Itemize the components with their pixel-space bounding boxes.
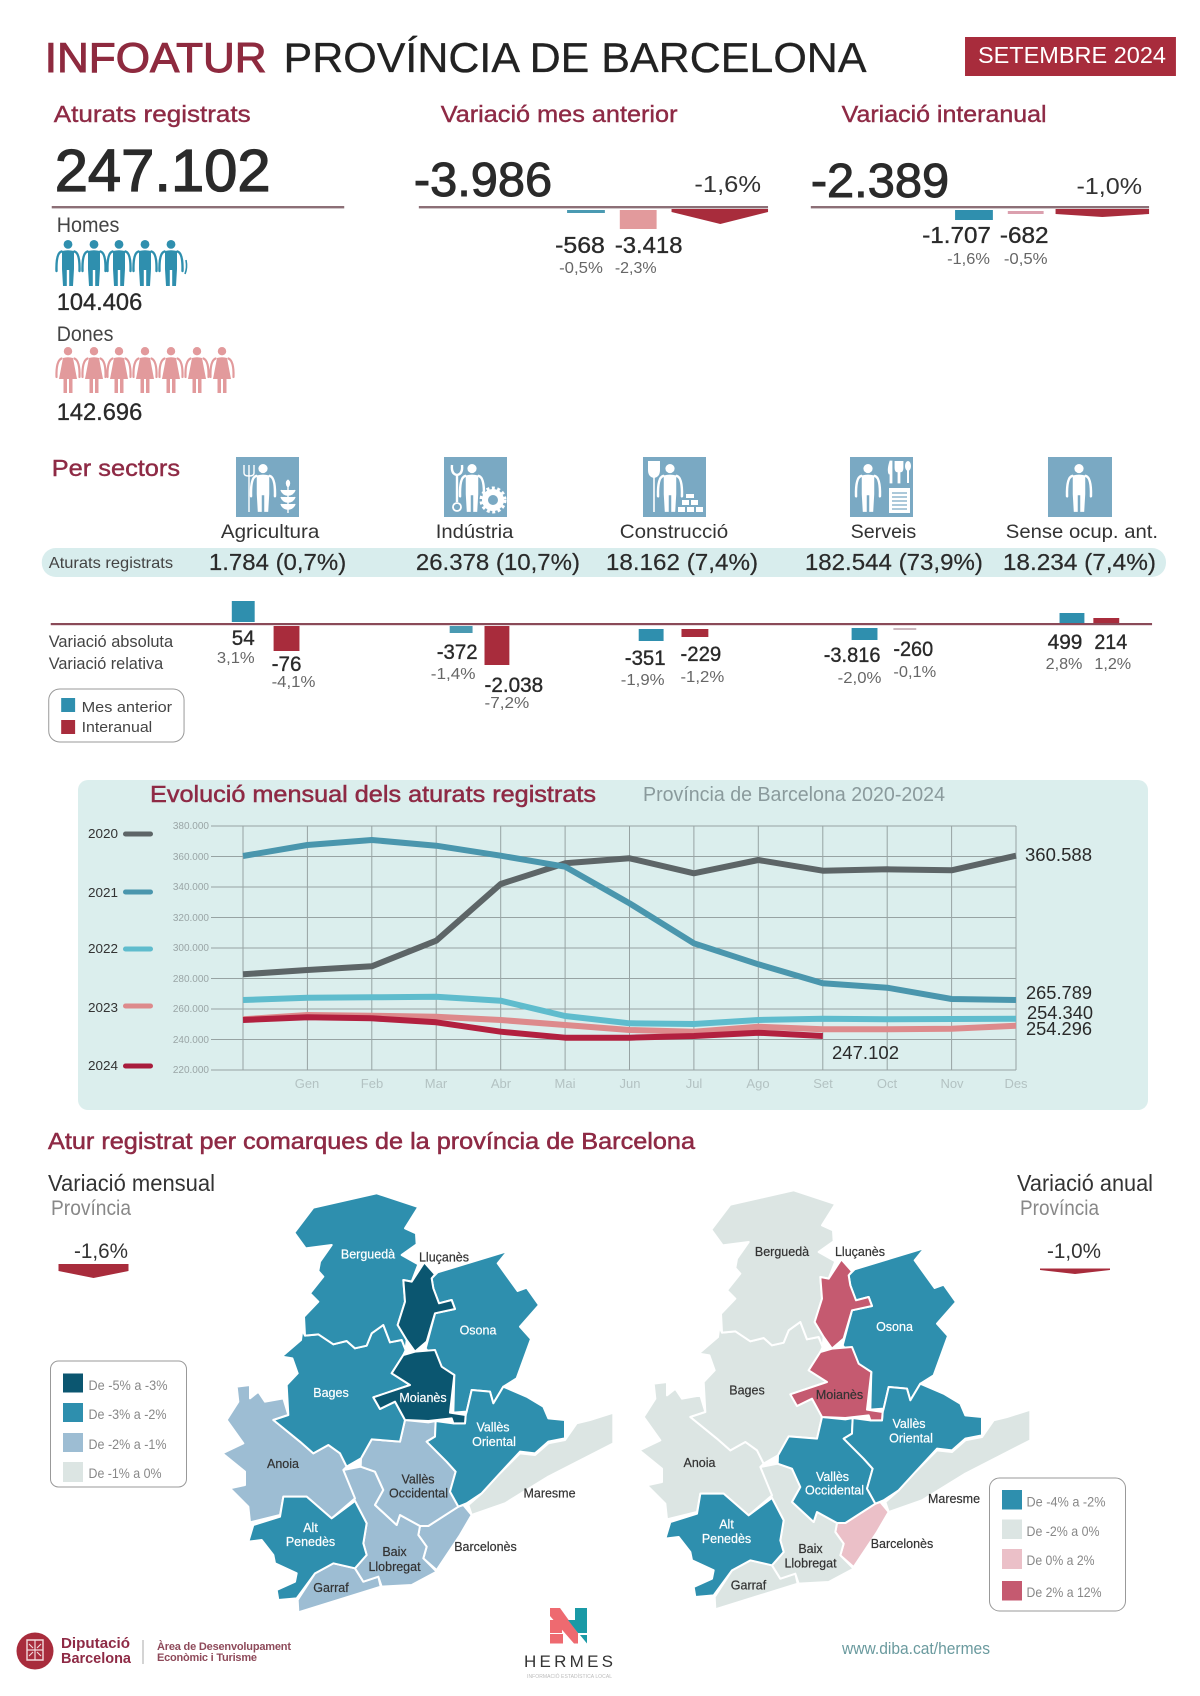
annual variation figure: -2.389 — [811, 155, 949, 208]
map labels: variació anual: Barcelonès — [871, 1537, 933, 1551]
x axis labels: Feb — [361, 1076, 383, 1091]
map labels: variació mensual: Alt — [303, 1521, 318, 1535]
heading: variació mensual: Província — [51, 1197, 131, 1220]
map labels: variació mensual: Barcelonès — [454, 1540, 517, 1554]
footer logo: Hermes: INFORMACIÓ ESTADÍSTICA LOCAL — [527, 1673, 612, 1680]
icon: serveis — [850, 457, 913, 517]
band: aturats registrats per sector: 26.378 (10,7%) — [416, 549, 580, 575]
heading: variació interanual: Variació interanual — [842, 101, 1047, 127]
footer logo: Hermes: HERMES — [524, 1652, 613, 1671]
map labels: variació anual — [684, 1245, 980, 1592]
panel: variació mes anterior — [414, 101, 768, 277]
title: INFOATUR — [45, 34, 267, 81]
chart heading: Evolució mensual dels aturats registrats — [150, 781, 596, 807]
bars: indústria: -372 — [437, 641, 478, 664]
chart legend: 2021 — [88, 885, 118, 900]
map labels: variació anual: Oriental — [889, 1432, 933, 1446]
line chart: 2021 — [243, 840, 1016, 1000]
icon: women pictogram — [56, 347, 234, 393]
bars: sense ocupació anterior: 214 — [1094, 631, 1128, 654]
y axis labels — [173, 821, 209, 1076]
arrow: down -1,6% — [672, 209, 768, 224]
y axis labels: 280.000 — [173, 974, 209, 985]
icon: Hermes H mark — [550, 1608, 587, 1644]
row labels: Variació absoluta — [49, 633, 174, 651]
bars: sense ocupació anterior: 1,2% — [1094, 656, 1131, 673]
map labels: variació anual: Berguedà — [755, 1245, 809, 1259]
map labels: variació mensual: Vallès — [401, 1473, 435, 1487]
bars: serveis: -0,1% — [893, 664, 936, 681]
legend: variació mensual: De -5% a -3% — [88, 1377, 168, 1393]
x axis labels: Set — [813, 1076, 833, 1091]
map labels: variació mensual: Penedès — [286, 1535, 335, 1549]
map labels: variació mensual: Garraf — [313, 1581, 349, 1595]
legend: variació anual: De 2% a 12% — [1026, 1584, 1102, 1600]
map: variació anual — [639, 1190, 1030, 1609]
y axis labels: 380.000 — [173, 821, 209, 832]
map labels: variació anual: Bages — [729, 1384, 765, 1398]
panel: variació interanual — [811, 101, 1149, 268]
bars: serveis: -2,0% — [838, 670, 881, 687]
panel: variació interanual: -0,5% — [1004, 251, 1048, 268]
bars: agricultura: -4,1% — [272, 674, 315, 691]
bars: construcció: -1,2% — [680, 669, 724, 686]
sector labels: Indústria — [436, 522, 514, 543]
y axis labels: 360.000 — [173, 852, 209, 863]
title — [45, 34, 867, 81]
y axis labels: 340.000 — [173, 882, 209, 893]
band: aturats registrats per sector: 182.544 (73,9%) — [805, 549, 983, 575]
map labels: variació anual: Vallès — [816, 1470, 849, 1484]
line chart: 2020 — [243, 856, 1016, 974]
x axis labels: Des — [1004, 1076, 1028, 1091]
map labels: variació mensual — [267, 1248, 576, 1595]
legend: variació mensual: De -2% a -1% — [88, 1436, 166, 1452]
panel: variació mensual — [48, 1170, 613, 1612]
panel: variació interanual: -1.707 — [922, 222, 991, 248]
x axis labels — [295, 1076, 1028, 1091]
panel: variació mes anterior: -568 — [555, 232, 605, 258]
map labels: variació anual: Maresme — [928, 1492, 980, 1506]
bars: agricultura — [217, 601, 315, 691]
x axis labels: Mar — [425, 1076, 448, 1091]
panel: aturats registrats — [52, 101, 344, 426]
legend: variació anual: De 0% a 2% — [1026, 1552, 1094, 1568]
map labels: variació mensual: Vallès — [476, 1420, 510, 1434]
panel: variació anual — [639, 1170, 1153, 1611]
bars: indústria: -1,4% — [431, 666, 476, 683]
line end values: 247.102 — [832, 1042, 899, 1063]
province annual variation: -1,0% — [1047, 1240, 1101, 1263]
title: PROVÍNCIA DE BARCELONA — [284, 34, 867, 81]
map labels: variació mensual: Osona — [460, 1324, 496, 1338]
bars: serveis — [824, 628, 936, 687]
map labels: variació anual: Occidental — [805, 1484, 864, 1498]
arrow: down -1,0% — [1056, 209, 1149, 217]
map labels: variació anual: Llobregat — [784, 1556, 837, 1570]
women count: 142.696 — [57, 399, 142, 426]
icon: men pictogram — [56, 240, 187, 286]
map labels: variació mensual: Bages — [313, 1386, 349, 1400]
legend: variació mensual: De -1% a 0% — [88, 1465, 162, 1481]
sector labels: Serveis — [851, 522, 916, 543]
icon: crest — [16, 1632, 54, 1670]
x axis labels: Jun — [620, 1076, 640, 1091]
heading: variació mensual: Variació mensual — [48, 1170, 215, 1196]
map labels: variació anual: Osona — [876, 1320, 913, 1334]
monthly variation figure: -3.986 — [414, 154, 552, 207]
map labels: variació anual: Vallès — [892, 1417, 926, 1431]
map labels: variació anual: Garraf — [731, 1578, 767, 1592]
bars: agricultura: -76 — [272, 653, 301, 676]
x axis labels: Mai — [555, 1076, 576, 1091]
chart legend: 2022 — [88, 941, 118, 956]
map labels: variació mensual: Occidental — [389, 1487, 448, 1501]
map labels: variació anual: Anoia — [684, 1456, 716, 1470]
heading: per sectors: Per sectors — [52, 455, 180, 481]
panel: variació mes anterior: -3.418 — [615, 232, 682, 258]
map labels: variació mensual: Lluçanès — [419, 1250, 469, 1264]
map labels: variació anual: Penedès — [702, 1532, 751, 1546]
map labels: variació mensual: Moianès — [399, 1391, 447, 1405]
panel: variació interanual: -1,6% — [947, 251, 990, 268]
band: aturats registrats per sector: 18.234 (7,4%) — [1003, 549, 1156, 575]
map labels: variació anual: Lluçanès — [835, 1245, 885, 1259]
legend: variació mensual: De -3% a -2% — [88, 1406, 166, 1422]
footer logo: Hermes — [524, 1608, 613, 1680]
legend: variació anual — [990, 1478, 1126, 1611]
map labels: variació anual: Alt — [719, 1518, 734, 1532]
map labels: variació mensual: Berguedà — [341, 1248, 395, 1262]
legend: variació anual: De -2% a 0% — [1026, 1523, 1100, 1539]
icon: indústria — [444, 457, 507, 517]
line end values: 254.296 — [1026, 1018, 1092, 1039]
map labels: variació mensual: Anoia — [267, 1457, 299, 1471]
bars: serveis: -3.816 — [824, 644, 880, 667]
bars: sense ocupació anterior: 499 — [1048, 631, 1082, 654]
total figure: 247.102 — [55, 139, 271, 204]
panel: per sectors — [42, 455, 1166, 742]
province annual variation — [1040, 1240, 1110, 1274]
icon: agricultura — [236, 457, 299, 517]
bars: indústria: -2.038 — [485, 674, 543, 697]
bars: serveis: -260 — [893, 638, 933, 661]
footer logo: Diputació Barcelona: Àrea de Desenvolupament — [157, 1640, 291, 1653]
band: aturats registrats per sector: Aturats registrats — [49, 555, 173, 572]
footer logo: Diputació Barcelona: Diputació — [61, 1635, 130, 1652]
x axis labels: Jul — [686, 1076, 702, 1091]
panel: evolució mensual — [78, 780, 1148, 1110]
text: dones: Dones — [57, 323, 113, 346]
footer logo: Diputació Barcelona: Econòmic i Turisme — [157, 1652, 257, 1664]
band: aturats registrats per sector: 18.162 (7,4%) — [606, 549, 758, 575]
bars: construcció: -1,9% — [621, 672, 665, 689]
x axis labels: Gen — [295, 1076, 319, 1091]
panel: variació mes anterior: -0,5% — [559, 260, 603, 277]
bars: sense ocupació anterior — [1046, 613, 1131, 673]
bars: agricultura: 54 — [232, 627, 255, 650]
map labels: variació mensual: Baix — [382, 1545, 407, 1559]
map: variació mensual — [222, 1193, 613, 1612]
legend: variació mensual — [50, 1361, 186, 1487]
x axis labels: Nov — [940, 1076, 964, 1091]
x axis labels: Ago — [746, 1076, 770, 1091]
legend: variació anual: De -4% a -2% — [1026, 1494, 1106, 1510]
date badge: SETEMBRE 2024 — [978, 42, 1166, 68]
province variation: -1,6% — [74, 1240, 128, 1263]
bars: construcció — [621, 629, 724, 689]
legend: sectors — [49, 689, 184, 742]
legend: sectors: Interanual — [82, 719, 152, 736]
map labels: variació anual: Baix — [798, 1542, 823, 1556]
top sections — [42, 34, 1176, 742]
footer url: www.diba.cat/hermes — [841, 1639, 990, 1658]
province variation — [58, 1240, 128, 1278]
band: aturats registrats per sector — [42, 548, 1166, 577]
footer logo: Diputació Barcelona: Barcelona — [61, 1650, 132, 1667]
panel: variació mes anterior: -2,3% — [615, 260, 657, 277]
chart legend: 2023 — [88, 1000, 118, 1015]
line end values: 360.588 — [1025, 844, 1092, 865]
y axis labels: 320.000 — [173, 913, 209, 924]
sector labels — [221, 522, 1158, 543]
x axis labels: Oct — [877, 1076, 897, 1091]
heading: variació anual: Província — [1020, 1197, 1099, 1220]
icon: construcció — [643, 457, 706, 517]
heading: variació mes anterior: Variació mes anterior — [441, 101, 678, 127]
date badge — [965, 37, 1176, 76]
chart legend — [88, 826, 153, 1073]
heading: variació anual: Variació anual — [1017, 1170, 1153, 1196]
footer logo: Diputació Barcelona — [16, 1632, 291, 1670]
map labels: variació anual: Moianès — [816, 1388, 863, 1402]
map labels: variació mensual: Llobregat — [368, 1560, 421, 1574]
map labels: variació mensual: Maresme — [523, 1487, 576, 1501]
y axis labels: 240.000 — [173, 1035, 209, 1046]
bars: construcció: -229 — [680, 643, 721, 666]
bars: indústria: -7,2% — [485, 695, 529, 712]
line end values: 254.340 — [1027, 1002, 1093, 1023]
bars: construcció: -351 — [625, 647, 666, 670]
line end values: 265.789 — [1026, 982, 1092, 1003]
y axis labels: 300.000 — [173, 943, 209, 954]
bars: sense ocupació anterior: 2,8% — [1046, 656, 1082, 673]
panel: variació mes anterior: -1,6% — [694, 171, 761, 197]
heading: aturats registrats: Aturats registrats — [54, 101, 251, 127]
sector labels: Construcció — [620, 522, 728, 543]
heading: comarques: Atur registrat per comarques de la província de Barcelona — [48, 1128, 695, 1154]
line chart: 2022 — [243, 997, 1016, 1024]
chart subheading: Província de Barcelona 2020-2024 — [643, 784, 945, 806]
icon: sense ocupació anterior — [1048, 457, 1112, 517]
text: homes: Homes — [57, 214, 119, 237]
line chart: 2023 — [243, 1015, 1016, 1032]
line chart: 2024 — [243, 1017, 823, 1038]
sector labels: Sense ocup. ant. — [1006, 522, 1158, 543]
chart legend: 2024 — [88, 1058, 118, 1073]
band: aturats registrats per sector: 1.784 (0,7%) — [209, 549, 346, 575]
bars: agricultura: 3,1% — [217, 650, 255, 667]
map labels: variació mensual: Oriental — [472, 1435, 516, 1449]
sector labels: Agricultura — [221, 522, 320, 543]
row labels: Variació relativa — [49, 655, 164, 673]
bar chart: variació per sector — [49, 601, 1152, 712]
men count: 104.406 — [57, 289, 142, 316]
x axis labels: Abr — [491, 1076, 512, 1091]
legend: sectors: Mes anterior — [82, 699, 172, 716]
bars: indústria — [431, 626, 543, 712]
heading: variació anual — [1017, 1170, 1153, 1220]
panel: variació interanual: -682 — [1000, 222, 1049, 248]
row labels — [49, 633, 174, 673]
line end values — [832, 844, 1093, 1063]
chart legend: 2020 — [88, 826, 118, 841]
panel: variació interanual: -1,0% — [1076, 173, 1142, 199]
heading: variació mensual — [48, 1170, 215, 1220]
y axis labels: 260.000 — [173, 1004, 209, 1015]
y axis labels: 220.000 — [173, 1065, 209, 1076]
